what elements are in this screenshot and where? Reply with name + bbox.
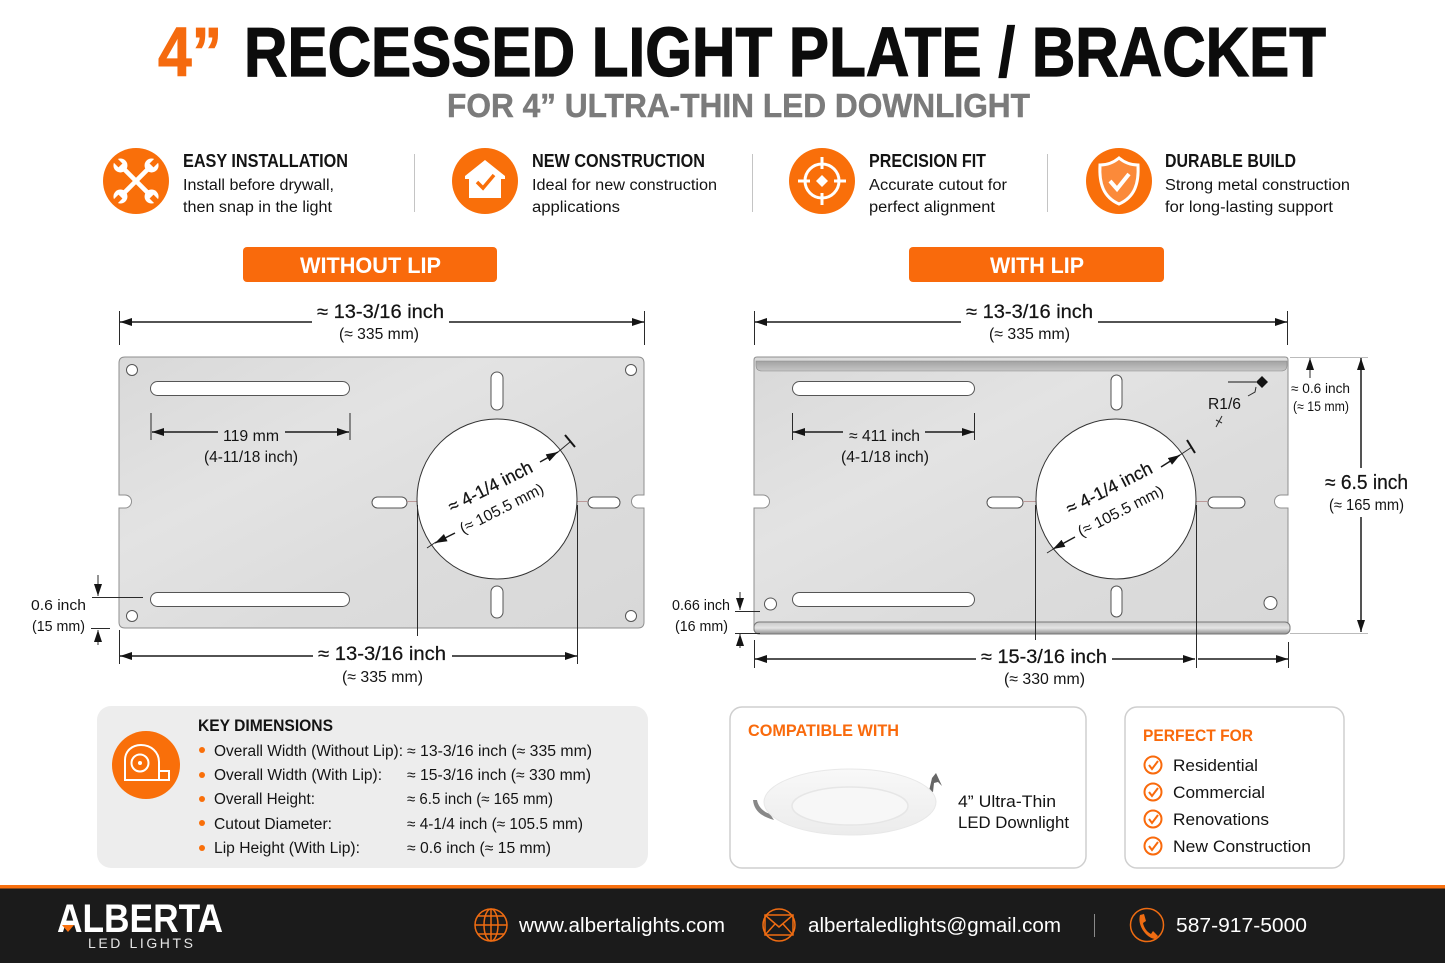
title: 4” xyxy=(158,13,222,91)
dimension: slot length: (4-1/18 inch) xyxy=(841,449,929,466)
badge: without lip xyxy=(243,247,497,282)
contact: phone xyxy=(1130,908,1307,942)
dimension: overall width top: ≈ 13-3/16 inch xyxy=(317,302,444,323)
spec rows: ≈ 15-3/16 inch (≈ 330 mm) xyxy=(407,767,591,784)
circular cutout xyxy=(417,419,577,579)
dimension: cutout diameter: ≈ 4-1/4 inch xyxy=(445,457,536,517)
spec rows: Cutout Diameter: xyxy=(214,816,332,833)
logo: LED LIGHTS xyxy=(88,935,193,951)
checklist: Residential xyxy=(1173,757,1258,775)
feature: precision fit: Accurate cutout for xyxy=(869,177,1007,194)
dimension: overall width top xyxy=(754,302,1288,345)
dimension: slot offset xyxy=(31,575,143,645)
contact: email: albertaledlights@gmail.com xyxy=(808,914,1061,937)
dimension: bottom width: (≈ 335 mm) xyxy=(342,669,423,686)
dimension: overall width top: (≈ 335 mm) xyxy=(339,326,419,343)
spec rows: Lip Height (With Lip): xyxy=(214,840,360,857)
dimension: cutout diameter xyxy=(427,435,575,548)
callout: radius R1/6: R1/6 xyxy=(1208,396,1241,413)
checklist: New Construction xyxy=(1173,838,1311,856)
feature: easy installation: then snap in the light xyxy=(183,199,333,216)
contact: website xyxy=(475,909,725,941)
checklist: Commercial xyxy=(1173,784,1265,802)
dimension: overall width top: (≈ 335 mm) xyxy=(989,326,1070,343)
panel: compatible with: 4” Ultra-Thin xyxy=(958,793,1056,811)
feature: durable build: Strong metal construction xyxy=(1165,177,1350,194)
spec rows: Overall Height: xyxy=(214,791,315,808)
feature: new construction xyxy=(452,148,717,216)
dimension: slot length xyxy=(792,413,974,466)
spec rows: ≈ 4-1/4 inch (≈ 105.5 mm) xyxy=(407,816,583,833)
mounting slots and holes xyxy=(764,375,1277,617)
dimension: bottom lip offset: (16 mm) xyxy=(675,619,728,635)
panel: perfect for xyxy=(1125,707,1344,868)
dimension: slot length: ≈ 411 inch xyxy=(849,428,920,445)
badge: with lip xyxy=(909,247,1164,282)
mounting slots and holes xyxy=(126,364,636,622)
feature: precision fit: PRECISION FIT xyxy=(869,151,986,171)
dimension: bottom width xyxy=(754,505,1288,688)
dimension: cutout diameter: (≈ 105.5 mm) xyxy=(457,481,547,538)
panel: compatible with xyxy=(730,707,1086,868)
icon: target xyxy=(789,148,855,214)
dimension: small lip height: ≈ 0.6 inch xyxy=(1291,381,1350,396)
feature: easy installation: EASY INSTALLATION xyxy=(183,151,348,171)
spec rows: Overall Width (With Lip): xyxy=(214,767,382,784)
dimension: overall width top xyxy=(120,302,644,345)
dimension: small lip height: (≈ 15 mm) xyxy=(1293,399,1349,414)
dimension: overall height: (≈ 165 mm) xyxy=(1329,497,1404,514)
dimension: bottom width: ≈ 13-3/16 inch xyxy=(318,644,446,665)
icon: crossed wrenches xyxy=(103,148,169,214)
bottom lip xyxy=(754,622,1290,634)
callout: radius R1/6 xyxy=(1208,376,1268,427)
badge: without lip: WITHOUT LIP xyxy=(300,253,441,278)
icon: LED downlight xyxy=(753,769,942,835)
dimension: overall height: ≈ 6.5 inch xyxy=(1325,472,1408,494)
spec rows: ≈ 6.5 inch (≈ 165 mm) xyxy=(407,791,553,808)
feature: new construction: applications xyxy=(532,199,620,216)
top lip xyxy=(756,361,1287,371)
panel: compatible with: LED Downlight xyxy=(958,814,1069,832)
feature: durable build: DURABLE BUILD xyxy=(1165,151,1296,171)
dimension: overall width top: ≈ 13-3/16 inch xyxy=(966,302,1093,323)
panel: compatible with: COMPATIBLE WITH xyxy=(748,721,899,740)
feature: durable build: for long-lasting support xyxy=(1165,199,1334,216)
dimension: slot length xyxy=(151,413,350,466)
checklist xyxy=(1144,756,1311,856)
feature: new construction: NEW CONSTRUCTION xyxy=(532,151,705,171)
diagram: plate without lip xyxy=(31,302,644,686)
icon: tape measure xyxy=(112,731,180,799)
circular cutout xyxy=(1036,419,1196,579)
contact: email xyxy=(763,909,1061,941)
dimension: bottom lip offset xyxy=(672,592,760,648)
feature: durable build xyxy=(1086,148,1350,216)
icon: house with check xyxy=(452,148,518,214)
logo: ALBERTA xyxy=(57,897,223,941)
contact: website: www.albertalights.com xyxy=(518,914,725,937)
diagram: plate with lip xyxy=(672,302,1408,688)
panel: key dimensions xyxy=(97,706,648,868)
contact: phone: 587-917-5000 xyxy=(1176,914,1307,937)
icon: shield xyxy=(1086,148,1152,214)
spec rows: Overall Width (Without Lip): xyxy=(214,743,403,760)
checklist: Renovations xyxy=(1173,811,1269,829)
dimension: cutout diameter xyxy=(1047,440,1195,553)
dimension: slot length: (4-11/18 inch) xyxy=(204,449,298,466)
dimension: slot offset: 0.6 inch xyxy=(31,597,86,614)
spec rows: ≈ 0.6 inch (≈ 15 mm) xyxy=(407,840,551,857)
panel: perfect for: PERFECT FOR xyxy=(1143,726,1253,745)
dimension: overall height xyxy=(1290,358,1408,634)
dimension: small lip height xyxy=(1291,358,1350,414)
dimension: cutout diameter: (≈ 105.5 mm) xyxy=(1075,483,1167,541)
dimension: cutout diameter: ≈ 4-1/4 inch xyxy=(1063,458,1156,519)
icon: globe xyxy=(475,909,507,941)
dimension: bottom lip offset: 0.66 inch xyxy=(672,598,730,614)
dimension: bottom width: (≈ 330 mm) xyxy=(1004,671,1085,688)
feature: new construction: Ideal for new construction xyxy=(532,177,717,194)
footer xyxy=(0,885,1445,963)
icon: envelope xyxy=(763,909,795,941)
metal plate xyxy=(754,357,1288,630)
dimension: bottom width xyxy=(120,505,578,686)
metal plate xyxy=(119,357,644,628)
spec rows xyxy=(199,743,592,857)
dimension: slot offset: (15 mm) xyxy=(32,618,85,635)
feature: precision fit: perfect alignment xyxy=(869,199,996,216)
subtitle: FOR 4” ULTRA-THIN LED DOWNLIGHT xyxy=(447,87,1030,124)
panel: key dimensions: KEY DIMENSIONS xyxy=(198,716,333,735)
badge: with lip: WITH LIP xyxy=(990,253,1084,278)
spec rows: ≈ 13-3/16 inch (≈ 335 mm) xyxy=(407,743,592,760)
feature: easy installation xyxy=(103,148,348,216)
feature: precision fit xyxy=(789,148,1007,216)
dimension: bottom width: ≈ 15-3/16 inch xyxy=(981,647,1107,668)
dimension: slot length: 119 mm xyxy=(223,428,279,445)
icon: phone xyxy=(1130,908,1164,942)
feature: easy installation: Install before drywall, xyxy=(183,177,334,194)
